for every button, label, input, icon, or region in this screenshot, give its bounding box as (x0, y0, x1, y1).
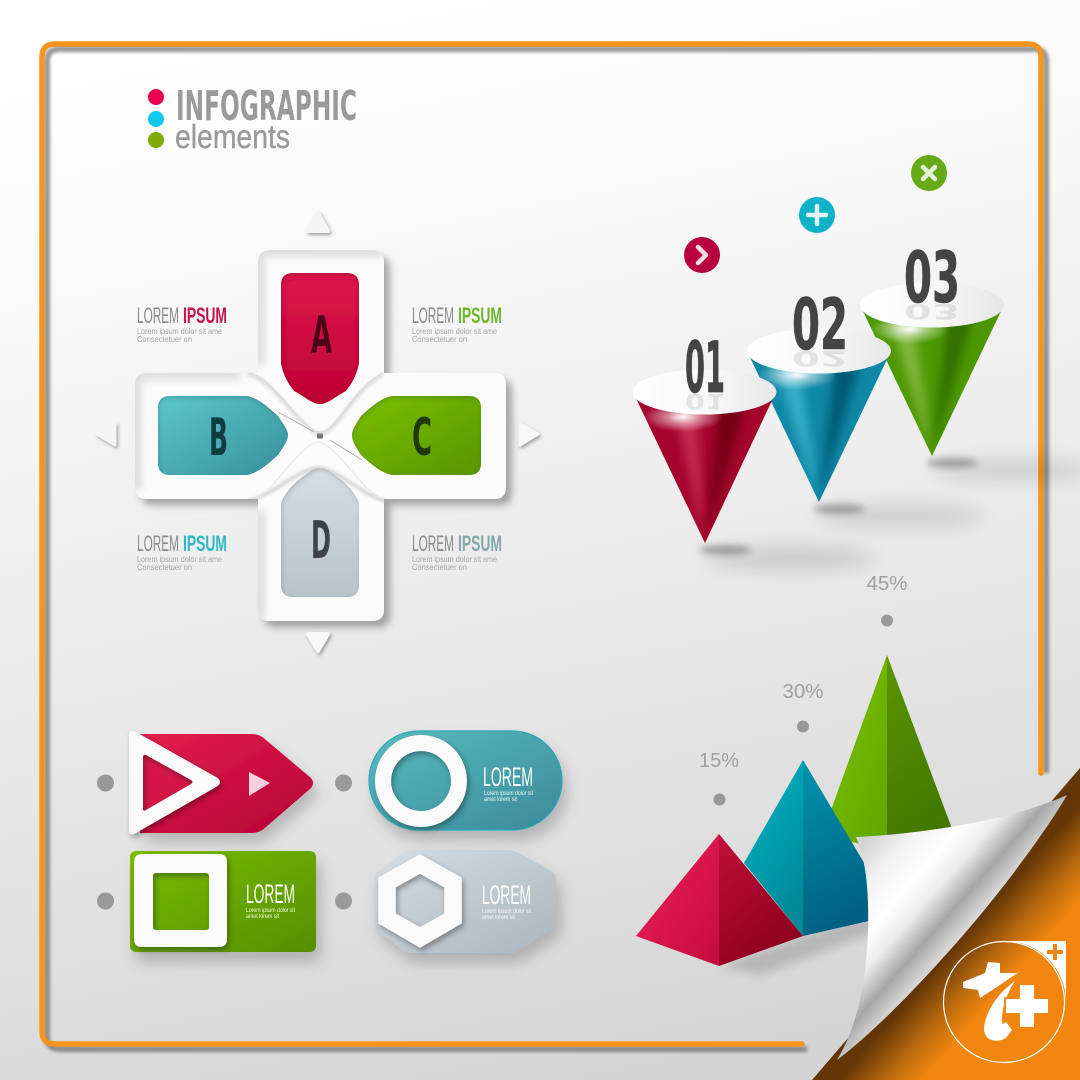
button: grey hexagon: amet lorem sit (482, 915, 515, 921)
panel: cross diagram (97, 213, 538, 651)
arrow: up (308, 213, 328, 231)
button: teal pill: amet lorem sit (484, 797, 517, 803)
arrow: down (308, 634, 328, 651)
button: grey hexagon: LOREM (482, 880, 531, 910)
label: top left: Lorem ipsum dolor sit ame (137, 327, 222, 336)
folded flap (837, 795, 1067, 1060)
pyramid shadow (719, 912, 880, 975)
label: bottom left: LOREM (137, 531, 179, 556)
button: teal pill: Lorem ipsum dolor sit (484, 791, 533, 797)
cone 03: 03 (904, 299, 960, 323)
panel: option buttons (97, 731, 562, 953)
label: top right: Consectetuer on (412, 335, 467, 344)
cone 03: 03 (904, 237, 960, 319)
label: top left: Consectetuer on (137, 335, 192, 344)
button: teal pill: LOREM (483, 762, 533, 792)
value: 45%: 45% (866, 573, 908, 595)
pyramid: 30% teal (744, 760, 895, 936)
subheading: elements: elements (175, 118, 290, 155)
value: 30% (782, 681, 824, 732)
label: top left: LOREM (137, 303, 179, 328)
window A: A (311, 306, 332, 366)
pyramid: 15% red (636, 834, 803, 966)
title colour dots (148, 89, 164, 148)
button: grey hexagon (374, 850, 556, 953)
window C (352, 396, 481, 475)
button: green rectangle (130, 851, 316, 952)
window D: D (311, 511, 331, 571)
label: bottom left: Consectetuer on (137, 563, 192, 572)
page curl corner (812, 768, 1080, 1080)
panel: cone chart (632, 155, 1080, 570)
label: top right (412, 303, 502, 344)
value: 45% (866, 573, 908, 626)
cone 02: 02 (792, 284, 848, 366)
label: bottom left: IPSUM (183, 531, 227, 556)
label: top right: IPSUM (458, 303, 502, 328)
value: 30%: 30% (782, 681, 824, 703)
cone 03 (860, 237, 1004, 456)
arrow: left (97, 424, 115, 445)
cone 01 (632, 327, 776, 543)
pyramid: 45% green (822, 655, 960, 850)
orange corner (812, 768, 1080, 1080)
icon: cyan plus (799, 197, 835, 233)
cone 01: 01 (685, 389, 725, 413)
panel: pyramid chart (636, 573, 960, 975)
cone shadows (699, 458, 1080, 570)
icon: red chevron (684, 237, 720, 273)
label: top left (137, 303, 227, 344)
cone 02: 02 (792, 346, 848, 370)
label: top right: LOREM (412, 303, 454, 328)
logo: t plus badge (944, 941, 1066, 1062)
window D (281, 468, 359, 597)
label: bottom right (412, 531, 502, 572)
cone 02 (747, 284, 891, 502)
label: top right: Lorem ipsum dolor sit ame (412, 327, 497, 336)
value: 15% (699, 750, 739, 806)
title block (148, 82, 357, 155)
arrow: right (520, 424, 538, 445)
cone 01: 01 (685, 327, 725, 409)
cross white base (135, 250, 506, 621)
label: bottom right: IPSUM (458, 531, 502, 556)
label: bottom left: Lorem ipsum dolor sit ame (137, 555, 222, 564)
bullet dots (97, 774, 352, 910)
window A (281, 273, 359, 404)
value: 15%: 15% (699, 750, 739, 772)
heading: INFOGRAPHIC: INFOGRAPHIC (176, 82, 357, 130)
label: bottom right: LOREM (412, 531, 454, 556)
button: green rectangle: Lorem ipsum dolor sit (246, 908, 295, 914)
window C: C (412, 408, 432, 468)
button: green rectangle: LOREM (246, 879, 295, 909)
label: bottom right: Consectetuer on (412, 563, 467, 572)
window B: B (209, 408, 228, 468)
button: green rectangle: amet lorem sit (246, 914, 279, 920)
button: grey hexagon: Lorem ipsum dolor sit (482, 909, 531, 915)
button: red arrow tag (129, 731, 313, 834)
button: teal pill (369, 731, 562, 830)
window B (158, 396, 288, 475)
label: bottom right: Lorem ipsum dolor sit ame (412, 555, 497, 564)
label: bottom left (137, 531, 227, 572)
icon: green cross (911, 155, 947, 191)
label: top left: IPSUM (183, 303, 227, 328)
